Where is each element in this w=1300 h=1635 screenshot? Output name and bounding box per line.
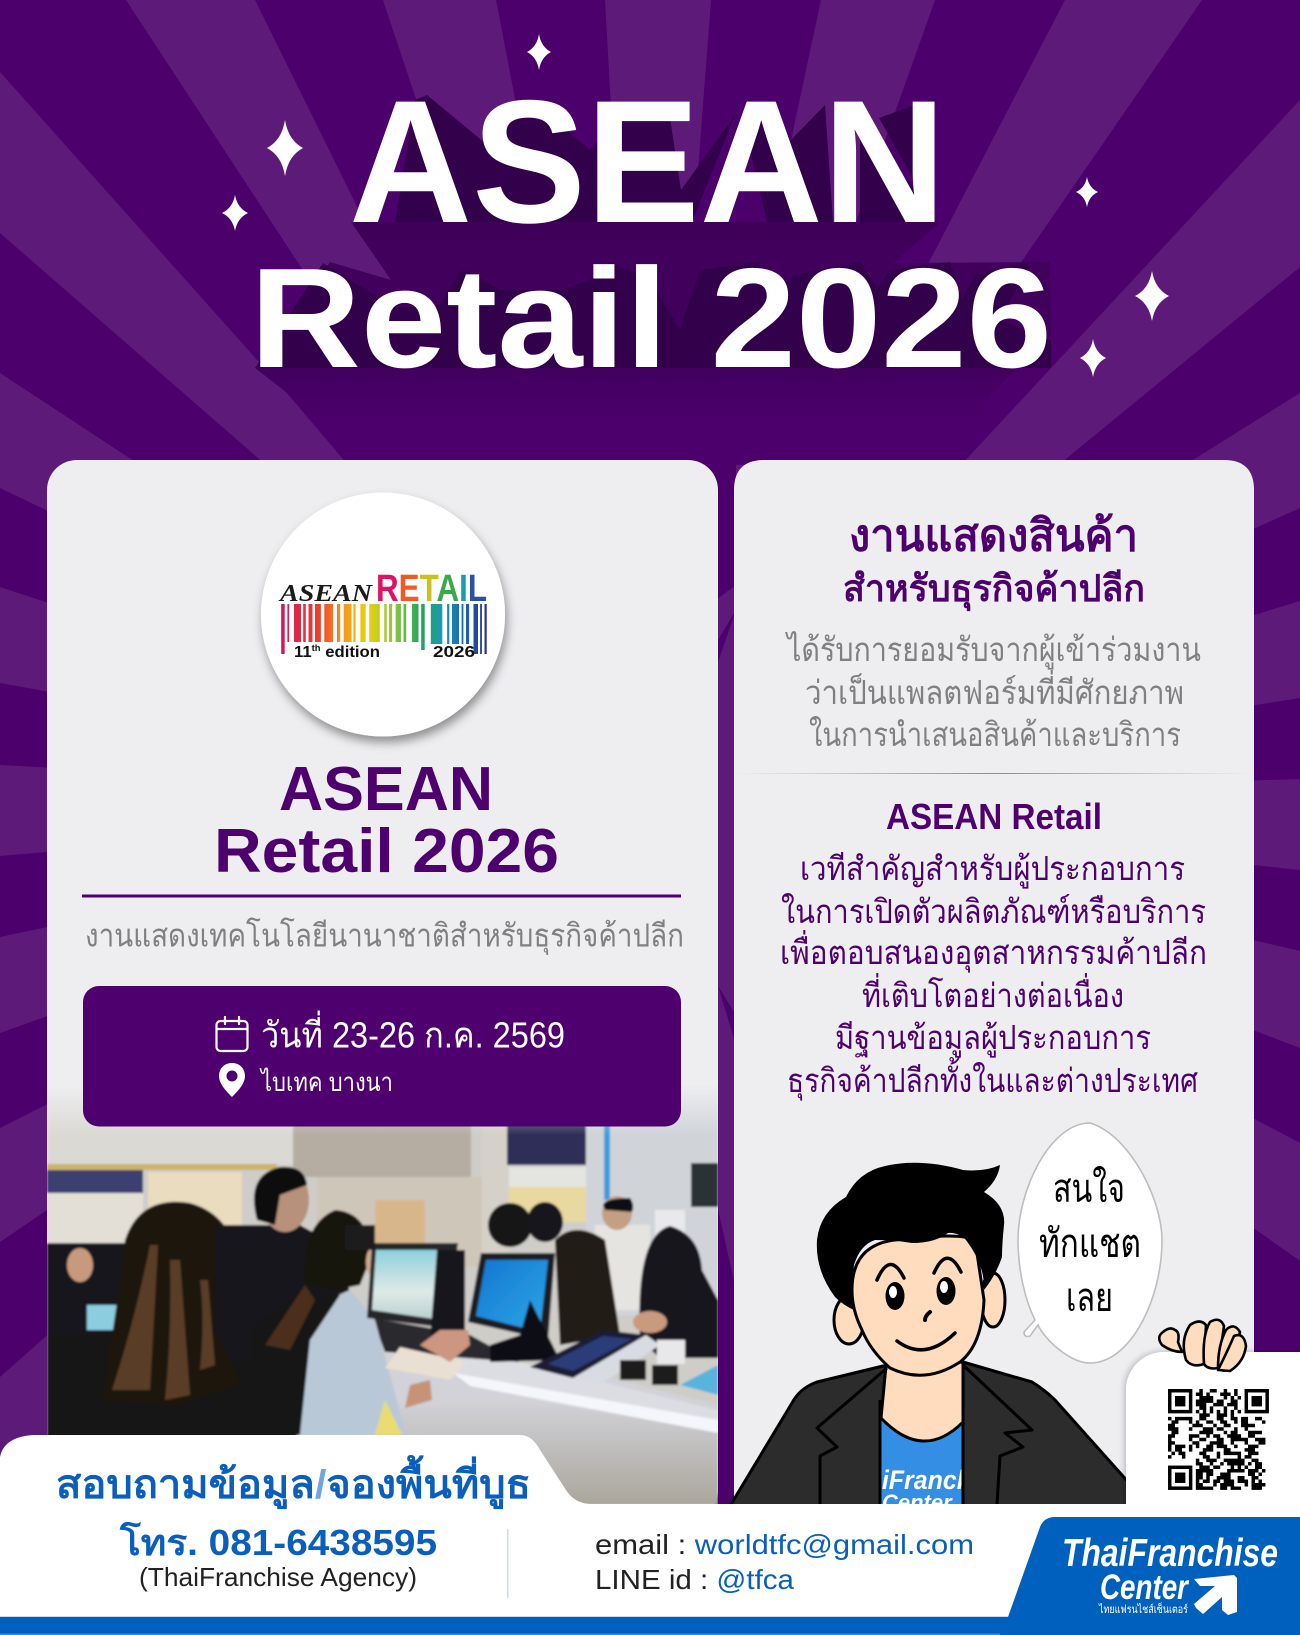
- email: email : worldtfc@gmail.com: [595, 1529, 974, 1560]
- description text: ในการเปิดตัวผลิตภัณฑ์หรือบริการ: [781, 893, 1206, 930]
- decorative sparkles: [222, 34, 1169, 377]
- logo wordmark: RETAIL: RETAIL: [376, 568, 487, 610]
- heading: trade show for retail: [843, 512, 1145, 612]
- recognition text: ว่าเป็นแพลตฟอร์มที่มีศักยภาพ: [805, 670, 1184, 711]
- mascot shirt: [882, 1420, 962, 1504]
- description text: ที่เติบโตอย่างต่อเนื่อง: [862, 973, 1124, 1014]
- speech text: สนใจ: [1053, 1165, 1125, 1211]
- icon: hand holding QR card: [1159, 1320, 1246, 1371]
- panel: left event card: [47, 460, 718, 1520]
- main title: ASEAN: [349, 65, 946, 260]
- logo Thai name: ไทยแฟรนไชส์เซ็นเตอร์: [1098, 1602, 1188, 1616]
- date text: วันที่ 23-26 ก.ค. 2569: [261, 1010, 565, 1056]
- main title: Retail 2026: [250, 239, 1052, 398]
- description text: มีฐานข้อมูลผู้ประกอบการ: [835, 1019, 1151, 1058]
- subheading: ASEAN Retail: ASEAN Retail: [886, 796, 1102, 837]
- mascot ears: [834, 1296, 864, 1344]
- venue text: ไบเทค บางนา: [259, 1067, 393, 1097]
- main title: [250, 65, 1052, 398]
- logo year: 2026: [433, 644, 475, 661]
- logo: ThaiFranchise Center: [1000, 1517, 1300, 1635]
- speech text: ทักแชต: [1039, 1222, 1141, 1266]
- phone number: โทร. 081-6438595: [119, 1521, 437, 1563]
- description text: ธุรกิจค้าปลีกทั้งในและต่างประเทศ: [787, 1057, 1198, 1101]
- recognition text: [784, 631, 1201, 753]
- event name heading: ASEAN: [279, 755, 493, 824]
- description text: เพื่อตอบสนองอุตสาหกรรมค้าปลีก: [780, 930, 1207, 973]
- description text: เวทีสำคัญสำหรับผู้ประกอบการ: [800, 850, 1185, 889]
- logo edition label: 11: [294, 644, 311, 661]
- icon: QR code: [1168, 1391, 1267, 1488]
- recognition text: ได้รับการยอมรับจากผู้เข้าร่วมงาน: [784, 631, 1201, 670]
- mascot eyes and brows: [877, 1258, 961, 1350]
- logo arrow: [1194, 1575, 1237, 1615]
- logo barcode: [281, 604, 487, 654]
- recognition text: ในการนำเสนอสินค้าและบริการ: [809, 716, 1181, 753]
- panel: QR card: [1126, 1352, 1300, 1572]
- mascot jacket: [730, 1362, 1130, 1506]
- event name heading: [214, 755, 559, 886]
- heading: trade show for retail: สำหรับธุรกิจค้าปลีก: [843, 568, 1145, 612]
- event subtitle: งานแสดงเทคโนโลยีนานาชาติสำหรับธุรกิจค้าปลีก: [85, 918, 684, 956]
- footer panel: [0, 1435, 1300, 1635]
- agency label: (ThaiFranchise Agency): [139, 1562, 417, 1592]
- mascot shirt: Center: [882, 1490, 953, 1515]
- heading: trade show for retail: งานแสดงสินค้า: [849, 512, 1138, 560]
- speech text: [1039, 1165, 1141, 1320]
- mascot shirt: aiFranch: [868, 1465, 972, 1495]
- event name heading: Retail 2026: [214, 817, 559, 886]
- icon: map pin: [219, 1063, 245, 1097]
- logo circle: [261, 492, 505, 736]
- photo: expo booth crowd: [47, 1085, 718, 1505]
- speech text: เลย: [1066, 1276, 1113, 1320]
- contact heading: สอบถามข้อมูล/จองพื้นที่บูธ: [56, 1455, 531, 1509]
- logo edition label: edition: [321, 644, 380, 661]
- date and venue box: [83, 986, 681, 1126]
- title long shadow: [255, 95, 1051, 465]
- description text: [780, 850, 1207, 1101]
- logo wordmark: ASEAN: ASEAN: [278, 581, 374, 607]
- panel: right description card: [734, 460, 1254, 1505]
- mascot hair: [817, 1163, 1004, 1310]
- character: mascot: [730, 1163, 1130, 1515]
- logo subname: Center: [1100, 1568, 1190, 1607]
- icon: calendar: [216, 1017, 248, 1051]
- speech bubble: [1018, 1123, 1162, 1363]
- mascot face: [852, 1236, 984, 1375]
- logo edition label: th: [312, 643, 321, 653]
- LINE id: LINE id : @tfca: [595, 1564, 794, 1595]
